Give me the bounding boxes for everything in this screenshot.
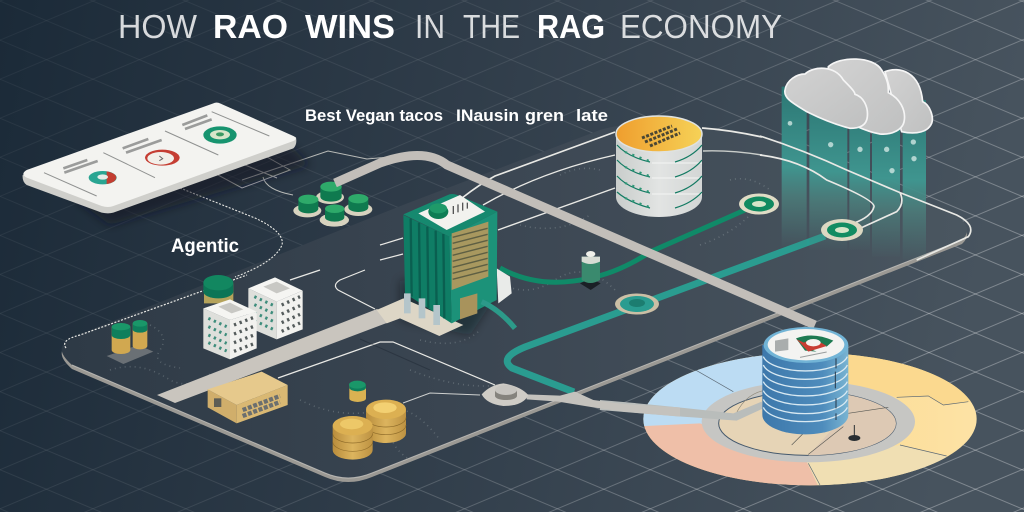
lower road to plaza [157,309,400,403]
shadow under building [400,280,500,335]
node: green circle [739,194,779,214]
blue stack [762,327,848,434]
front white building [203,299,257,359]
text label: search query: late [576,106,608,125]
node: central silver junction [482,383,680,417]
large tank [203,275,233,303]
panel: orange-top database [616,116,702,217]
text label: search query: Best Vegan tacos [305,106,443,125]
panel: cloud over teal server towers [760,59,971,260]
front coin stack [333,416,373,460]
main grey road [335,155,815,325]
white circuit lines [278,128,762,403]
title: WINS [305,8,395,45]
title: IN [415,8,445,45]
grey feed line [600,400,763,421]
title: ECONOMY [620,8,782,45]
back coin stack [366,400,406,443]
text label: search query: INausin [456,106,519,125]
inner road-side tank on base [107,320,153,364]
text label: Agentic: Agentic [171,236,239,257]
title: RAO [213,8,288,45]
segment: salmon [644,423,818,486]
thin connector lines beneath dashboard [218,151,400,195]
warehouse [208,372,288,423]
gauge: green ring [203,126,237,144]
gauge: red ring [145,150,180,166]
segment: tan [807,445,947,486]
title: RAG [537,8,605,45]
panel: green headquarters building [377,194,515,336]
green data line [500,210,745,282]
icon: green chip cluster [293,182,372,227]
panel: segmented pie and blue stack [600,327,987,490]
back white building [248,277,303,339]
title [118,8,782,45]
icon: small battery unit [580,251,601,290]
dashed connector from dashboard [180,188,282,277]
shadow under dashboard [70,145,310,225]
gauge: teal and red [89,171,117,184]
teal data line [507,236,825,392]
panel: dashboard tablet [23,103,296,213]
node: green circle on teal line [821,219,863,241]
title: THE [463,8,520,45]
text label: search query: gren [525,106,564,125]
segment: orange [848,354,971,404]
title: HOW [118,8,198,45]
node: teal circle [615,294,659,314]
segment: blue [643,356,762,426]
small jar [349,381,366,402]
white outer curve over towers [760,136,971,260]
panel: lower-left buildings and storage [107,275,406,460]
panel: isometric city platform [62,123,967,482]
